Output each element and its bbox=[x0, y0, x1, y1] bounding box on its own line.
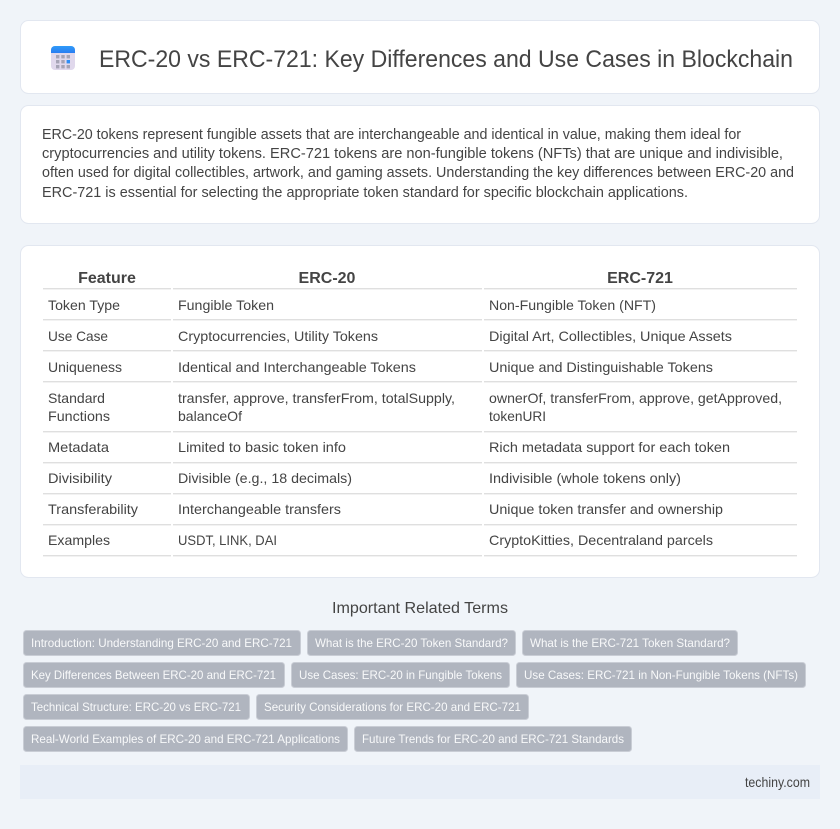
row: transferability: Unique token transfer and ownership bbox=[489, 501, 723, 517]
row: divisibility: Indivisible (whole tokens only) bbox=[489, 470, 681, 486]
title: ERC-20 vs ERC-721: Key Differences and Use Cases in Blockchain bbox=[99, 46, 793, 73]
row: examples: Examples bbox=[48, 532, 110, 548]
tag bbox=[24, 630, 300, 656]
row: use case: Use Case bbox=[48, 328, 108, 344]
tag bbox=[24, 726, 348, 752]
heading: related terms: Important Related Terms bbox=[332, 600, 508, 617]
row: uniqueness: Identical and Interchangeable Tokens bbox=[178, 359, 416, 375]
row: metadata bbox=[48, 439, 730, 455]
row: standard functions: Standard bbox=[48, 390, 105, 406]
header panel bbox=[20, 20, 820, 94]
row: standard functions bbox=[48, 390, 782, 424]
table header: Feature bbox=[78, 270, 136, 287]
tag bbox=[354, 726, 632, 752]
icon: calendar bbox=[51, 46, 75, 70]
tag: Technical Structure: ERC-20 vs ERC-721 bbox=[31, 700, 241, 714]
row: use case bbox=[48, 328, 732, 344]
row: standard functions: tokenURI bbox=[489, 408, 546, 424]
footer text: techiny.com bbox=[745, 774, 810, 790]
row: metadata: Limited to basic token info bbox=[178, 439, 346, 455]
row: uniqueness bbox=[48, 359, 713, 375]
row: use case: Digital Art, Collectibles, Unique Assets bbox=[489, 328, 732, 344]
tag: Real-World Examples of ERC-20 and ERC-721 Applications bbox=[31, 732, 340, 746]
tag bbox=[522, 630, 738, 656]
description text: cryptocurrencies and utility tokens. ERC-721 tokens are non-fungible tokens (NFTs) that are unique and indivisible, bbox=[42, 146, 783, 162]
row: uniqueness: Uniqueness bbox=[48, 359, 122, 375]
panel: comparison table bbox=[20, 246, 820, 578]
footer bbox=[20, 765, 820, 799]
tag: Security Considerations for ERC-20 and ERC-721 bbox=[264, 700, 521, 714]
row: examples bbox=[48, 532, 713, 548]
panel: related term tags bbox=[24, 630, 806, 752]
description text: ERC-20 tokens represent fungible assets that are interchangeable and identical in value, making them ideal for bbox=[42, 127, 741, 143]
row: standard functions: ownerOf, transferFrom, approve, getApproved, bbox=[489, 390, 782, 406]
tag bbox=[308, 630, 516, 656]
row: metadata: Metadata bbox=[48, 439, 109, 455]
tag: Introduction: Understanding ERC-20 and ERC-721 bbox=[31, 636, 292, 650]
table header: ERC-20 bbox=[299, 270, 356, 287]
row: standard functions: Functions bbox=[48, 408, 110, 424]
row: transferability: Interchangeable transfers bbox=[178, 501, 341, 517]
row: use case: Cryptocurrencies, Utility Tokens bbox=[178, 328, 378, 344]
row: standard functions: balanceOf bbox=[178, 408, 242, 424]
row: transferability: Transferability bbox=[48, 501, 138, 517]
row: divisibility bbox=[48, 470, 681, 486]
tag bbox=[516, 662, 806, 688]
row: token type: Token Type bbox=[48, 297, 120, 313]
tag: Key Differences Between ERC-20 and ERC-721 bbox=[31, 668, 276, 682]
tag: What is the ERC-20 Token Standard? bbox=[315, 636, 508, 650]
row: token type: Non-Fungible Token (NFT) bbox=[489, 297, 656, 313]
row: token type: Fungible Token bbox=[178, 297, 274, 313]
tag bbox=[24, 694, 250, 720]
row: standard functions: transfer, approve, transferFrom, totalSupply, bbox=[178, 390, 455, 406]
row: divisibility: Divisibility bbox=[48, 470, 112, 486]
tag bbox=[292, 662, 510, 688]
row: transferability bbox=[48, 501, 723, 517]
row: examples: USDT, LINK, DAI bbox=[178, 532, 277, 548]
row: metadata: Rich metadata support for each token bbox=[489, 439, 730, 455]
tag bbox=[256, 694, 528, 720]
row: divisibility: Divisible (e.g., 18 decimals) bbox=[178, 470, 352, 486]
tag: Use Cases: ERC-721 in Non-Fungible Tokens (NFTs) bbox=[524, 668, 798, 682]
description text bbox=[42, 127, 794, 201]
description text: often used for digital collectibles, artwork, and gaming assets. Understanding the key differences between ERC-20 and bbox=[42, 165, 794, 181]
tag bbox=[24, 662, 284, 688]
tag: What is the ERC-721 Token Standard? bbox=[530, 636, 730, 650]
table header: ERC-721 bbox=[607, 270, 673, 287]
row: examples: CryptoKitties, Decentraland parcels bbox=[489, 532, 713, 548]
description text: ERC-721 is essential for selecting the appropriate token standard for specific blockchain applications. bbox=[42, 185, 688, 201]
row: token type bbox=[48, 297, 656, 313]
table header bbox=[78, 270, 673, 287]
tag: Use Cases: ERC-20 in Fungible Tokens bbox=[299, 668, 502, 682]
tag: Future Trends for ERC-20 and ERC-721 Standards bbox=[362, 732, 624, 746]
panel: description bbox=[20, 106, 820, 224]
row: uniqueness: Unique and Distinguishable Tokens bbox=[489, 359, 713, 375]
